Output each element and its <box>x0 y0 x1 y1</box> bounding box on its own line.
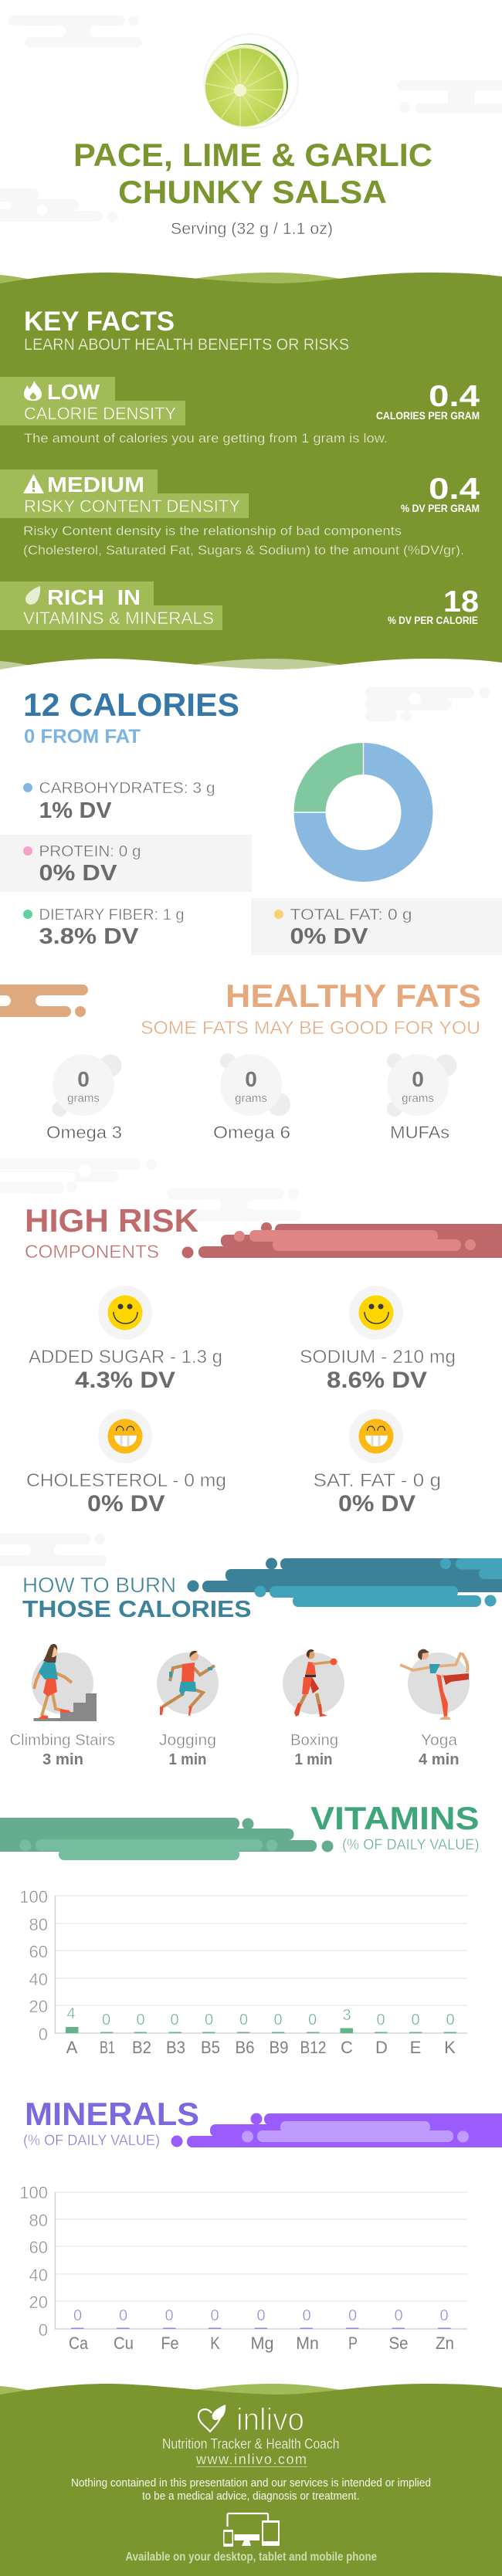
bar chart: vitamins: 60 <box>29 1942 48 1961</box>
item: saturated fat: SAT. FAT - 0 g <box>314 1470 441 1491</box>
bar chart: minerals: Mg <box>250 2334 273 2353</box>
subheading: SOME FATS MAY BE GOOD FOR YOU <box>141 1018 480 1039</box>
bar chart: vitamins: 20 <box>29 1997 48 2016</box>
bar chart: vitamins: 0 <box>205 2012 213 2029</box>
icon: lime slice <box>204 34 298 128</box>
bar chart: minerals: Se <box>389 2334 408 2353</box>
heading: those calories: THOSE CALORIES <box>22 1595 252 1622</box>
panel: minerals <box>19 2096 502 2353</box>
bar chart: minerals: Cu <box>114 2334 134 2353</box>
bar chart: vitamins: 0 <box>239 2012 248 2029</box>
bar chart: vitamins: 80 <box>29 1915 48 1934</box>
bar chart: vitamins: 3 <box>342 2007 351 2024</box>
legend: carbohydrates <box>23 780 215 823</box>
stat: mufas <box>387 1053 457 1142</box>
label: Climbing Stairs <box>9 1732 115 1749</box>
heading: vitamins: VITAMINS <box>310 1800 479 1836</box>
bar chart: minerals: Zn <box>436 2334 454 2353</box>
fact: rich in vitamins and minerals: VITAMINS & MINERALS <box>23 608 214 628</box>
bar chart: vitamins: 4 <box>66 2005 76 2022</box>
bar chart: vitamins: B2 <box>132 2038 151 2057</box>
icon: warning triangle <box>23 474 44 493</box>
stat: mufas: MUFAs <box>390 1123 449 1142</box>
availability note: Available on your desktop, tablet and mobile phone <box>125 2551 377 2564</box>
bar chart: minerals: 0 <box>348 2307 357 2324</box>
bar chart: minerals: P <box>348 2334 358 2353</box>
subheading: LEARN ABOUT HEALTH BENEFITS OR RISKS <box>24 336 349 354</box>
bar chart: minerals: 0 <box>210 2307 219 2324</box>
bar chart: vitamins: 0 <box>308 2012 317 2029</box>
fact: medium risky content density: Risky Content density is the relationship of bad components <box>23 524 402 538</box>
logo: inlivo heart and leaf <box>198 2401 304 2437</box>
icon: leaf <box>25 586 40 605</box>
bar chart: vitamins: 100 <box>19 1887 48 1907</box>
bar chart: minerals: K <box>210 2334 220 2353</box>
panel: footer <box>0 2384 502 2576</box>
legend: protein <box>0 835 252 892</box>
serving size: Serving (32 g / 1.1 oz) <box>171 220 333 238</box>
fact: low calorie density: 0.4 <box>429 380 480 413</box>
fact: rich in vitamins and minerals: RICH IN <box>47 585 141 609</box>
subheading: (% OF DAILY VALUE) <box>23 2133 160 2149</box>
bar chart: minerals: Fe <box>161 2334 179 2353</box>
background clouds top <box>0 15 502 222</box>
background clouds mid <box>0 1158 301 1221</box>
stat: omega 6: Omega 6 <box>213 1123 290 1142</box>
fact: low calorie density: CALORIE DENSITY <box>24 404 176 423</box>
stat: omega 3: 0 <box>77 1067 90 1091</box>
bar chart: vitamins: B9 <box>269 2038 289 2057</box>
legend: total fat: 0% DV <box>290 924 368 949</box>
bar chart: minerals: Mn <box>296 2334 319 2353</box>
activity: jogging: 1 min <box>168 1751 207 1768</box>
fact: medium risky content density: RISKY CONTENT DENSITY <box>24 497 240 516</box>
bar chart: vitamins: 0 <box>411 2012 420 2029</box>
stat: omega 3: grams <box>67 1092 100 1105</box>
bar chart: minerals: 0 <box>256 2307 266 2324</box>
fact: medium risky content density: 0.4 <box>429 473 480 506</box>
disclaimer: to be a medical advice, diagnosis or treatment. <box>142 2490 360 2503</box>
panel: calories <box>0 686 502 955</box>
heading: key facts: KEY FACTS <box>24 307 175 337</box>
logo: inlivo heart and leaf: inlivo <box>236 2401 304 2437</box>
label: Yoga <box>421 1732 458 1749</box>
bar chart: minerals: 60 <box>29 2238 48 2257</box>
cloud: teal <box>187 1558 502 1607</box>
bar chart: minerals: 0 <box>302 2307 311 2324</box>
stat: omega 3 <box>46 1054 122 1142</box>
label: Boxing <box>290 1732 338 1749</box>
bar chart: vitamins: A <box>66 2038 78 2057</box>
bar chart: vitamins: 0 <box>273 2012 283 2029</box>
bar chart: minerals: 0 <box>394 2307 403 2324</box>
legend: dietary fiber: DIETARY FIBER: 1 g <box>39 907 184 924</box>
bar chart: minerals: Ca <box>69 2334 89 2353</box>
item: sodium: 8.6% DV <box>327 1368 427 1393</box>
icon: flame <box>24 381 42 401</box>
bar chart: minerals: 80 <box>29 2211 48 2230</box>
bar chart: vitamins: B1 <box>100 2038 115 2057</box>
cloud: red <box>182 1222 502 1259</box>
subheading: from fat: 0 FROM FAT <box>24 726 141 747</box>
background cloud <box>365 687 490 721</box>
bar chart: minerals: 40 <box>29 2266 48 2285</box>
bar chart: vitamins: B6 <box>235 2038 255 2057</box>
cloud: purple <box>171 2113 502 2147</box>
bar chart: vitamins: E <box>410 2038 421 2057</box>
bar chart: vitamins: 0 <box>102 2012 110 2029</box>
title: CHUNKY SALSA <box>118 174 387 210</box>
heading: minerals: MINERALS <box>25 2096 199 2132</box>
activity: yoga: 4 min <box>419 1751 459 1768</box>
bar chart: vitamins: 0 <box>170 2012 179 2029</box>
stat: omega 3: Omega 3 <box>46 1123 122 1142</box>
item: cholesterol: 0% DV <box>87 1491 165 1517</box>
heading: calories: 12 CALORIES <box>23 686 239 723</box>
subheading: components: COMPONENTS <box>25 1242 159 1263</box>
panel: healthy fats <box>0 978 481 1142</box>
bar chart: vitamins <box>19 1887 467 2057</box>
bar chart: vitamins: D <box>375 2038 388 2057</box>
stat: omega 6: 0 <box>245 1067 257 1091</box>
tagline: Nutrition Tracker & Health Coach <box>162 2436 340 2452</box>
activity: jogging <box>157 1651 219 1768</box>
legend: total fat: TOTAL FAT: 0 g <box>290 907 412 924</box>
legend: dietary fiber: 3.8% DV <box>39 924 139 949</box>
panel: vitamins <box>0 1800 479 2057</box>
bar chart: vitamins: 0 <box>376 2012 385 2029</box>
background cloud <box>0 1534 107 1566</box>
cloud: tan <box>0 985 88 1017</box>
legend: carbohydrates: 1% DV <box>39 798 112 823</box>
icon: devices <box>223 2513 280 2547</box>
stat: omega 6: grams <box>235 1092 267 1105</box>
fact: rich in vitamins and minerals <box>0 581 479 630</box>
item: saturated fat: 0% DV <box>338 1491 416 1517</box>
activity: yoga <box>400 1649 470 1768</box>
activity: boxing <box>283 1649 344 1768</box>
activity: climbing stairs <box>9 1644 115 1768</box>
bar chart: vitamins: 0 <box>136 2012 145 2029</box>
bar chart: vitamins: C <box>341 2038 353 2057</box>
bar chart: minerals <box>19 2183 467 2353</box>
bar chart: vitamins: B12 <box>300 2038 326 2057</box>
heading: high risk: HIGH RISK <box>25 1202 198 1239</box>
stat: omega 6 <box>213 1053 290 1142</box>
legend: carbohydrates: CARBOHYDRATES: 3 g <box>39 780 215 797</box>
bar chart: vitamins: 0 <box>39 2025 48 2044</box>
item: sodium: SODIUM - 210 mg <box>300 1347 456 1368</box>
stat: mufas: 0 <box>412 1067 424 1091</box>
subheading: (% OF DAILY VALUE) <box>342 1837 479 1853</box>
panel: key facts <box>0 273 502 695</box>
item: sodium <box>300 1286 456 1393</box>
bar chart: minerals: 0 <box>119 2307 127 2324</box>
fact: low calorie density: CALORIES PER GRAM <box>376 410 480 422</box>
fact: medium risky content density: % DV PER GRAM <box>401 503 480 514</box>
cloud: green <box>0 1818 334 1860</box>
legend: protein: 0% DV <box>39 861 117 886</box>
item: added sugar: 4.3% DV <box>75 1368 175 1393</box>
label: Jogging <box>159 1732 216 1749</box>
legend: dietary fiber <box>23 907 184 949</box>
bar chart: vitamins: K <box>444 2038 456 2057</box>
title <box>73 137 432 210</box>
item: added sugar <box>29 1286 222 1393</box>
fact: low calorie density <box>0 377 480 446</box>
bar chart: vitamins: 40 <box>29 1970 48 1989</box>
fact: low calorie density: LOW <box>47 380 100 404</box>
fact: low calorie density: The amount of calories you are getting from 1 gram is low. <box>24 431 388 446</box>
website: www.inlivo.com <box>195 2452 307 2467</box>
heading: healthy fats: HEALTHY FATS <box>226 978 481 1014</box>
fact: rich in vitamins and minerals: % DV PER CALORIE <box>388 615 478 626</box>
bar chart: vitamins: B5 <box>201 2038 220 2057</box>
activity: climbing stairs: 3 min <box>42 1751 83 1768</box>
title: PACE, LIME & GARLIC <box>73 137 432 173</box>
item: added sugar: ADDED SUGAR - 1.3 g <box>29 1347 222 1368</box>
bar chart: vitamins: B3 <box>166 2038 185 2057</box>
activity: boxing: 1 min <box>295 1751 332 1768</box>
item: saturated fat <box>314 1409 441 1517</box>
fact: rich in vitamins and minerals: 18 <box>443 585 479 619</box>
fact: medium risky content density <box>0 469 480 558</box>
bar chart: minerals: 0 <box>39 2320 48 2340</box>
bar chart: minerals: 0 <box>73 2307 82 2324</box>
heading: how to burn: HOW TO BURN <box>22 1573 176 1597</box>
legend: protein: PROTEIN: 0 g <box>39 843 141 860</box>
fact: medium risky content density: (Cholesterol, Saturated Fat, Sugars & Sodium) to the amount (%DV/gr). <box>23 543 464 558</box>
disclaimer <box>71 2476 431 2503</box>
donut chart <box>293 743 432 882</box>
bar chart: minerals: 0 <box>165 2307 174 2324</box>
bar chart: vitamins: 0 <box>446 2012 455 2029</box>
stat: mufas: grams <box>402 1092 434 1105</box>
panel: high risk components <box>25 1202 502 1517</box>
item: cholesterol <box>26 1409 226 1517</box>
bar chart: minerals: 0 <box>439 2307 449 2324</box>
bar chart: minerals: 20 <box>29 2293 48 2312</box>
bar chart: minerals: 100 <box>19 2183 48 2202</box>
disclaimer: Nothing contained in this presentation and our services is intended or implied <box>71 2476 431 2490</box>
panel: how to burn those calories <box>0 1534 502 1768</box>
fact: medium risky content density: MEDIUM <box>47 473 144 497</box>
legend: total fat <box>251 898 502 955</box>
item: cholesterol: CHOLESTEROL - 0 mg <box>26 1470 226 1491</box>
